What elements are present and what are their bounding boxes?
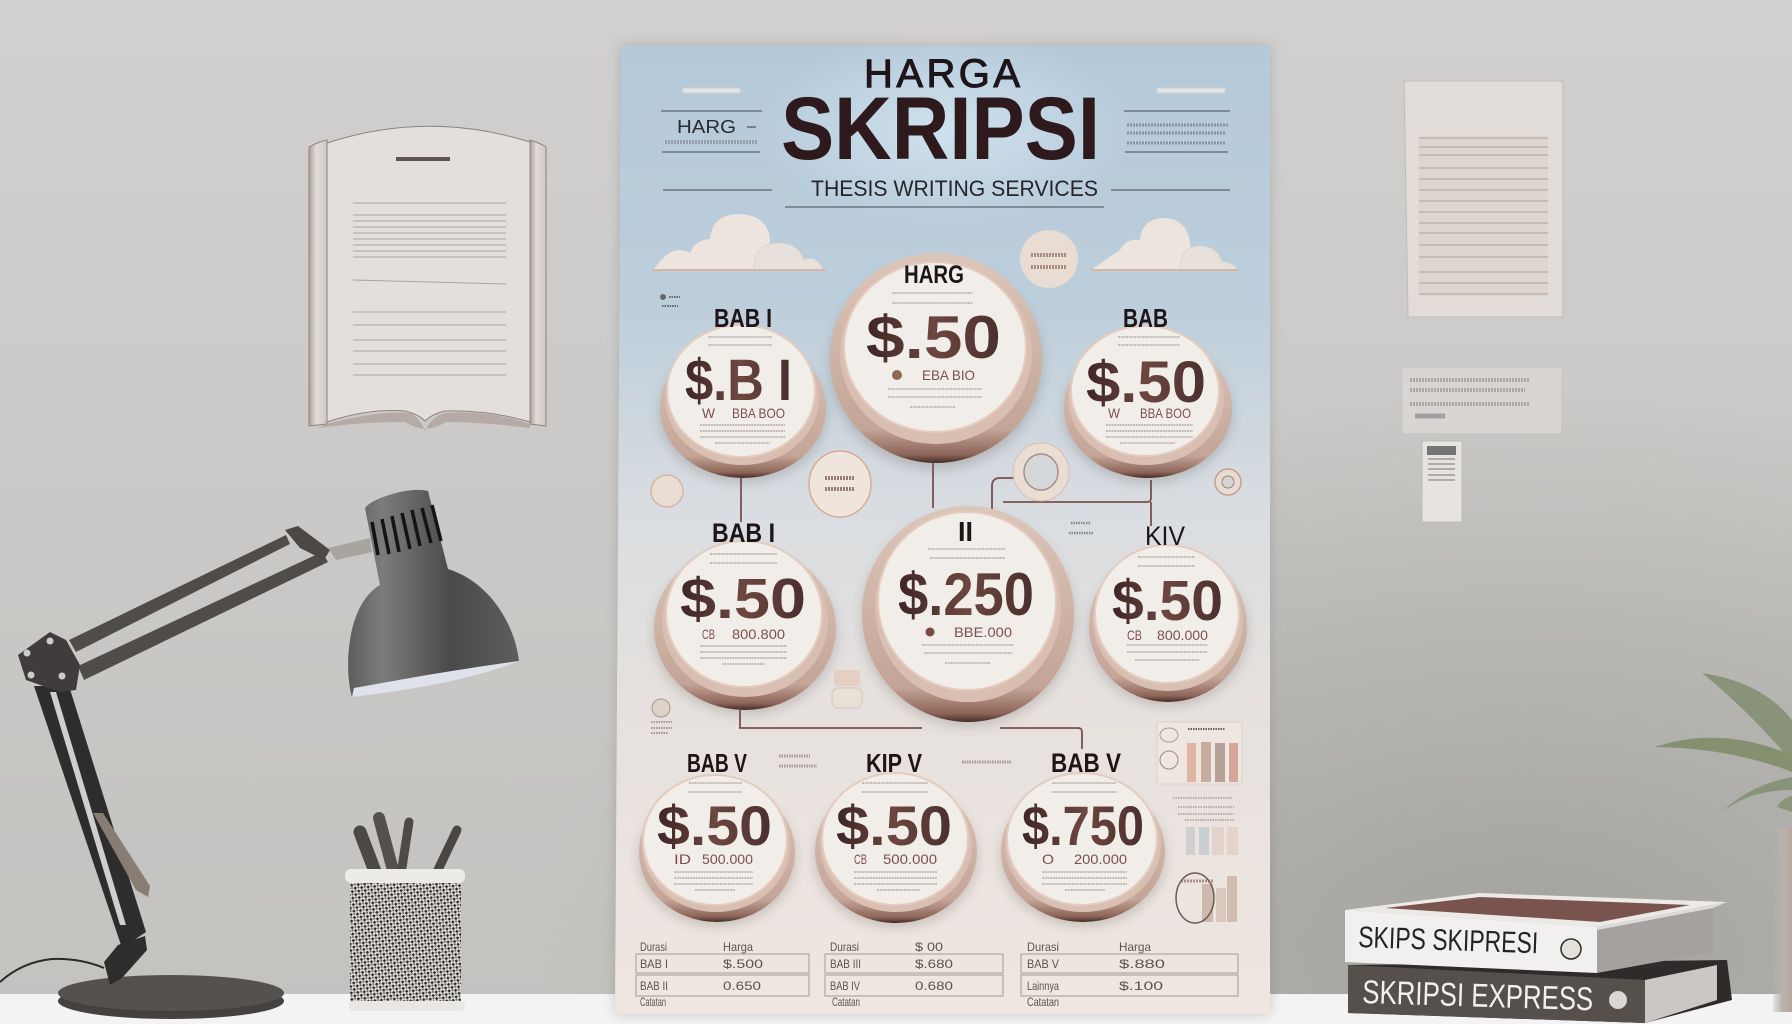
price table left [636,940,809,1009]
small badge right [1215,469,1241,495]
price disc: BAB V right: BAB V [1051,748,1121,778]
small pill icon [832,670,862,708]
price table middle: $ 00 [915,940,943,954]
price table left: BAB I [640,957,668,971]
price disc: BAB top right: BAB [1123,303,1168,333]
price table middle: BAB IV [830,979,860,993]
price table right: Catatan [1027,995,1059,1009]
price table right: Harga [1119,940,1151,954]
price disc: HARG: EBA BIO [922,367,975,383]
price disc: BAB I middle: CB [702,626,715,642]
small note beside KIV [1069,523,1093,533]
title: HARGA [864,52,1020,96]
price disc: BAB I top: W [702,405,716,421]
price disc: KIP V: KIP V [866,748,923,778]
price table right: $.100 [1119,979,1163,993]
price disc: KIV: $.50 [1112,569,1223,633]
cloud left [653,214,826,270]
subtitle: THESIS WRITING SERVICES [811,176,1098,201]
small badge left [651,475,683,507]
price disc: BAB V left: BAB V [687,748,747,778]
price disc: II: $.250 [898,561,1034,628]
price table right: $.880 [1119,957,1165,971]
price table right: Durasi [1027,940,1059,954]
pen holder [345,818,465,1011]
badge top [1020,230,1078,288]
price table right: Lainnya [1027,979,1059,993]
price disc: KIV: KIV [1145,521,1185,551]
price disc: KIP V [815,748,977,927]
floating notes [779,756,1012,766]
price table middle: Catatan [832,995,860,1009]
price disc: BAB V left: 500.000 [702,851,753,867]
right wall paper [1404,81,1563,317]
price disc: KIP V: 500.000 [883,851,937,867]
price table left: 0.650 [723,979,761,993]
desk surface [0,994,1792,1024]
price table left: BAB II [640,979,668,993]
connector lines [740,463,1151,749]
price table middle [825,940,1003,1009]
price disc: KIP V: CB [854,851,867,867]
price disc: BAB I middle [654,518,836,714]
price disc: BAB I middle: $.50 [680,567,806,631]
price table left: Harga [723,940,753,954]
price disc: BAB top right: $.50 [1086,350,1206,415]
header side block right [1124,88,1230,152]
price disc: KIV [1089,521,1247,706]
chart card top [1157,722,1242,784]
price disc: BAB V right [1001,748,1165,926]
open book wall print [309,126,546,431]
price disc: BAB I middle: 800.800 [732,626,785,642]
small note left [660,294,680,306]
price disc: BAB V right: $.750 [1022,794,1144,857]
small wall card [1422,441,1462,522]
price disc: KIV: 800.000 [1157,627,1208,643]
plant and vase [1655,673,1792,1012]
price disc: BAB top right: W [1108,405,1121,421]
title: SKRIPSI [781,78,1100,178]
price disc: BAB V right: 200.000 [1074,851,1127,867]
subtitle [663,176,1230,207]
price disc: II [862,506,1074,726]
price table right [1021,940,1238,1009]
price table right: BAB V [1027,957,1059,971]
price table middle: $.680 [915,957,953,971]
price disc: HARG [830,253,1042,469]
price disc: HARG: $.50 [866,304,1001,371]
price disc: BAB top right [1064,303,1232,482]
small ring badge [1013,443,1069,501]
book spine text bottom: SKRIPSI EXPRESS [1362,973,1594,1017]
price table left: Durasi [640,940,667,954]
poster panel [615,35,1270,1014]
price disc: KIP V: $.50 [836,794,952,857]
price disc: BAB V left: ID [674,851,691,867]
chart card bottom [1176,873,1237,923]
header side block left [661,88,762,152]
price disc: BAB top right: BBA BOO [1140,405,1191,421]
price disc: BAB V left [639,748,795,926]
price disc: BAB I top: $.B I [685,348,792,413]
small wall note [1403,368,1561,433]
price table left: Catatan [640,995,666,1009]
small badge centre [809,451,871,517]
price table middle: Durasi [830,940,859,954]
stacked books [1345,893,1732,1023]
small icon left [651,699,672,733]
price disc: BAB I top: BBA BOO [732,405,785,421]
price disc: BAB V right: O [1042,851,1054,867]
price table middle: BAB III [830,957,861,971]
price disc: II: II [958,516,973,547]
price disc: BAB I top: BAB I [714,303,772,333]
price table middle: 0.680 [915,979,953,993]
price disc: HARG: HARG [904,261,964,289]
price disc: BAB I top [660,303,826,482]
price disc: II: BBE.000 [954,624,1012,640]
header side block left: HARG [677,117,736,137]
book spine text top: SKIPS SKIPRESI [1358,921,1539,960]
price disc: BAB V left: $.50 [657,794,772,857]
chart notes [1173,798,1238,855]
cloud right [1091,218,1238,270]
desk lamp [0,490,519,1019]
price disc: BAB I middle: BAB I [712,518,775,548]
poster shadow [615,46,1270,1014]
price table left: $.500 [723,957,763,971]
price disc: KIV: CB [1127,627,1142,643]
